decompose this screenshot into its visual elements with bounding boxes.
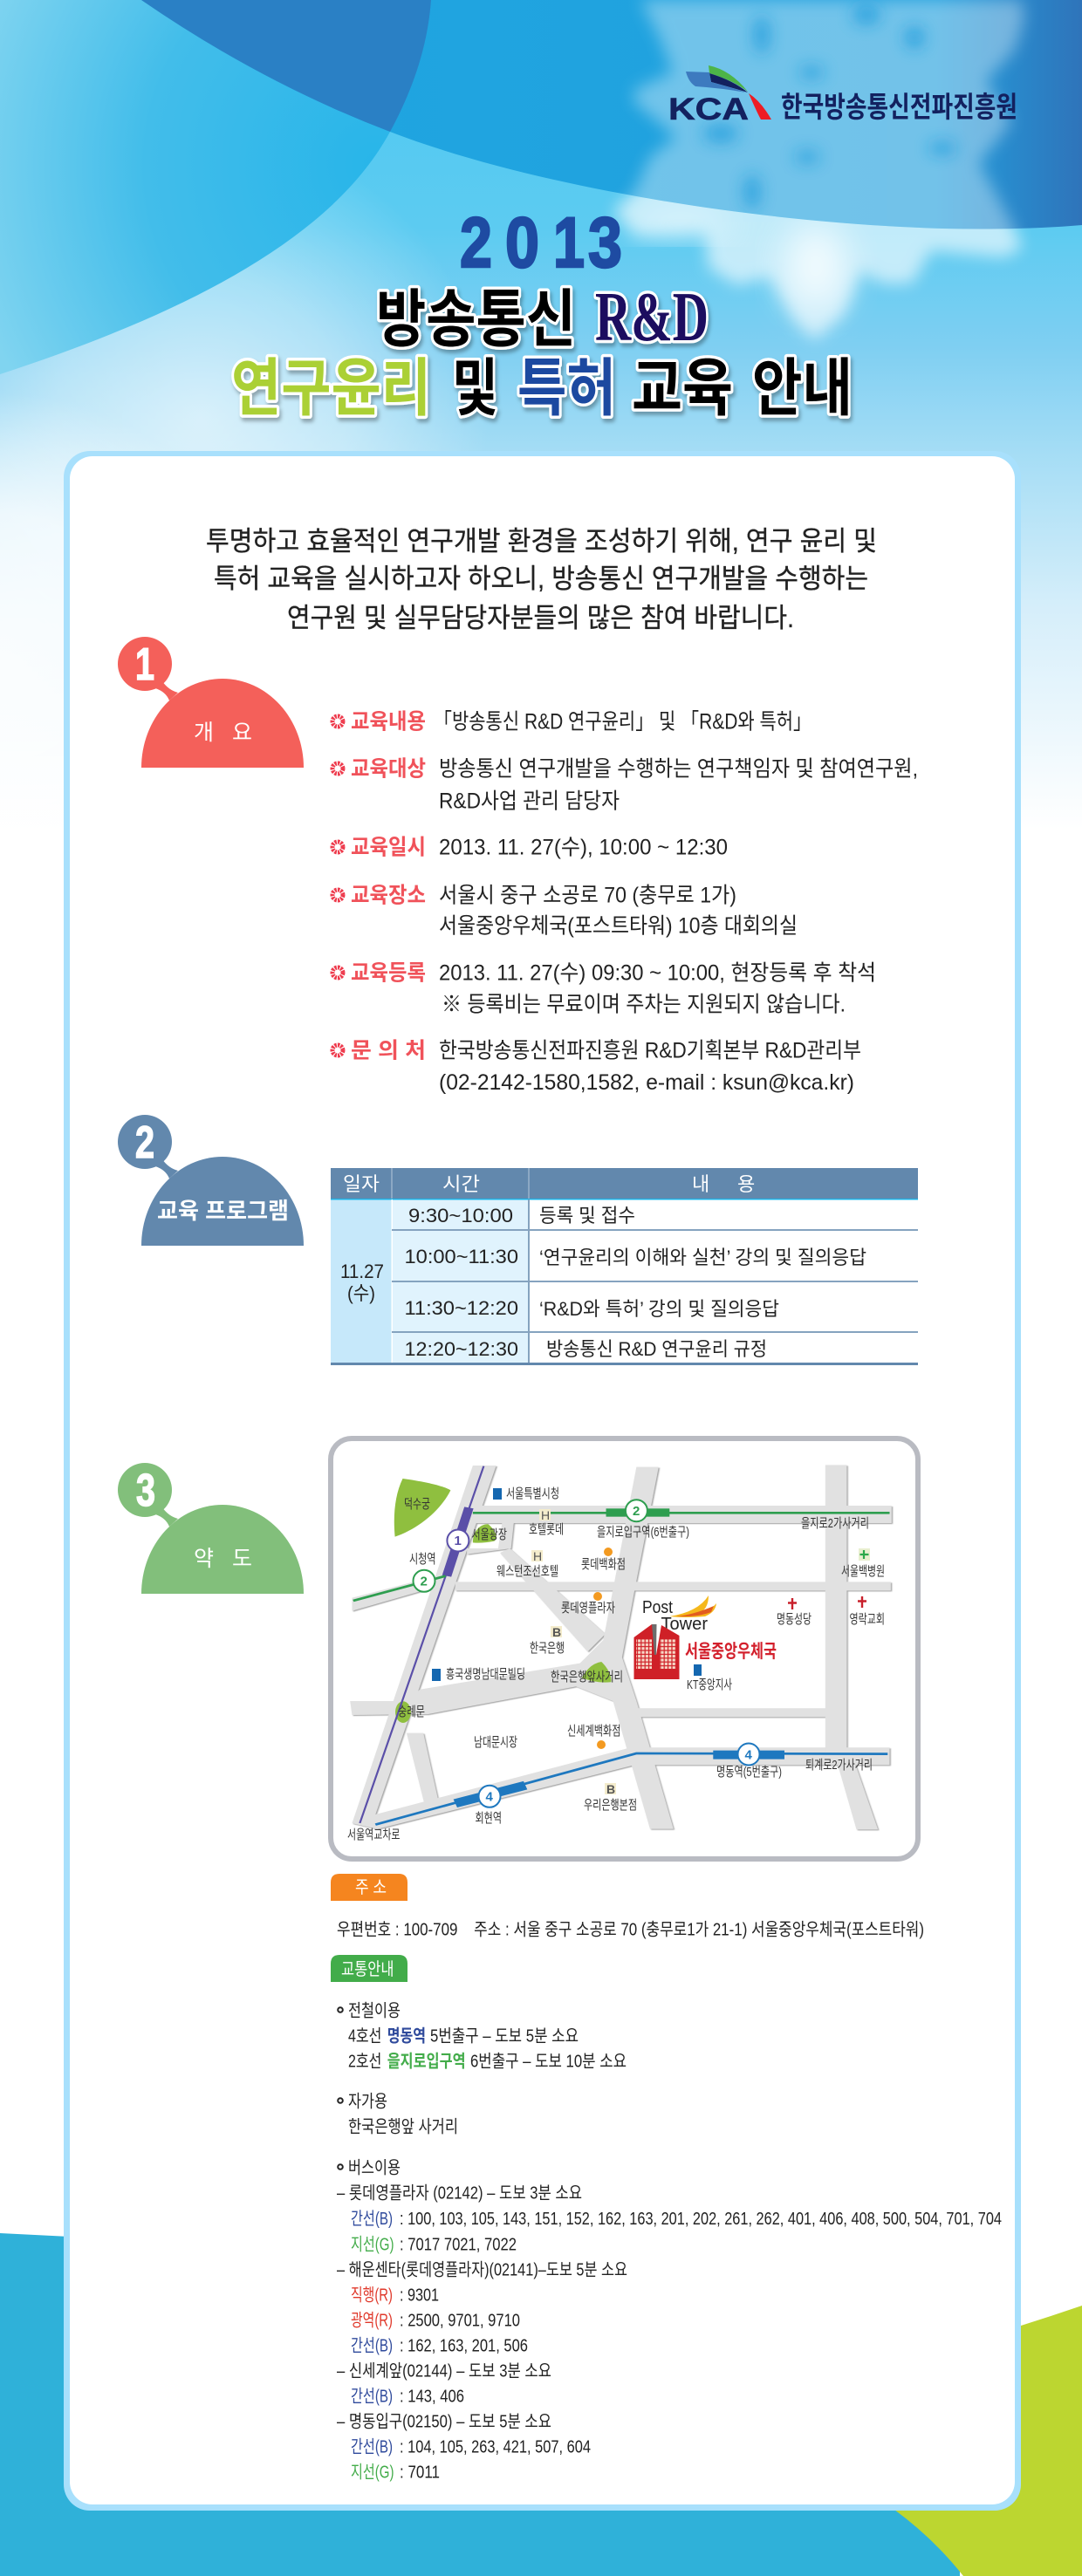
transit: bus: 간선(B) [351, 2209, 393, 2229]
badge 3: 약도 [118, 1463, 304, 1594]
logo: KCA: 한국방송통신전파진흥원 [781, 91, 1017, 123]
badge 2: 교육 프로그램 [118, 1115, 304, 1246]
transit: bus: : 9301 [400, 2286, 439, 2305]
row: registration: 9:30~10:00 [408, 1205, 513, 1227]
title: main heading [231, 279, 853, 424]
item: 교육장소: 서울중앙우체국(포스트타워) 10층 대회의실 [439, 914, 798, 939]
badge 2: 교육 프로그램: 2 [135, 1117, 154, 1168]
transit: subway: 6번출구 – 도보 10분 소요 [470, 2052, 627, 2071]
transit: bus [337, 2158, 1002, 2483]
map landmark labels: 롯데백화점 [581, 1557, 626, 1572]
station markers: 2 [633, 1504, 640, 1519]
row: regulations: 방송통신 R&D 연구윤리 규정 [546, 1338, 767, 1360]
item: 문의처: 한국방송통신전파진흥원 R&D기획본부 R&D관리부 [439, 1038, 861, 1063]
title: year: 2 [460, 203, 492, 283]
item: 교육등록: ※ 등록비는 무료이며 주차는 지원되지 않습니다. [442, 993, 846, 1017]
map landmark labels: 명동성당 [777, 1612, 812, 1627]
title: year [460, 203, 622, 283]
station markers: 1 [454, 1534, 462, 1548]
map landmark labels: 서울광장 [471, 1527, 507, 1542]
item: 교육일시: 2013. 11. 27(수), 10:00 ~ 12:30 [439, 836, 728, 860]
title: year: 0 [505, 203, 539, 283]
intro paragraph: 특허 교육을 실시하고자 하오니, 방송통신 연구개발을 수행하는 [214, 564, 868, 594]
item: 교육등록 [332, 961, 876, 1017]
item: 교육등록: 교육등록 [351, 961, 426, 986]
map landmark labels: 호텔롯데 [529, 1522, 564, 1537]
map landmark labels: 서울백병원 [841, 1564, 885, 1579]
row: ethics lecture: 10:00~11:30 [405, 1246, 518, 1268]
Post Tower logo: Post [642, 1598, 673, 1617]
row: regulations: 12:20~12:30 [405, 1338, 518, 1360]
item: 문의처: (02-2142-1580,1582, e-mail : ksun@kca.kr) [439, 1070, 854, 1095]
transit: bus: 간선(B) [351, 2437, 393, 2456]
title: main heading: 연구윤리 [231, 354, 431, 424]
tab: 주소: 주 소 [355, 1878, 387, 1897]
item: 문의처 [332, 1038, 861, 1095]
map landmark labels: 한국은행 [530, 1641, 565, 1656]
logo: KCA: KCA [668, 92, 749, 126]
intro paragraph [206, 526, 877, 633]
row: regulations [405, 1338, 767, 1360]
transit: car [338, 2092, 458, 2137]
transit: subway: 전철이용 [348, 2001, 401, 2020]
bottom shape: blue [0, 2233, 960, 2576]
map landmark labels: 한국은행앞사거리 [551, 1670, 623, 1684]
transit: bus: – 롯데영플라자 (02142) – 도보 3분 소요 [337, 2183, 582, 2204]
station markers: 2 [421, 1574, 428, 1589]
date cell: 11.27 [340, 1261, 384, 1282]
transit: subway: 명동역 [387, 2026, 426, 2046]
badge 1: 개요 [118, 637, 304, 768]
item: 교육대상: 교육대상 [351, 757, 426, 782]
transit: bus: 광역(R) [351, 2310, 393, 2331]
table header: 용 [737, 1173, 755, 1195]
item: 교육장소: 서울시 중구 소공로 70 (충무로 1가) [439, 883, 736, 907]
tab: 교통안내: 교통안내 [341, 1959, 394, 1979]
map landmark labels: 흥국생명남대문빌딩 [446, 1666, 525, 1682]
panel: main content card [64, 451, 1021, 2511]
logo: KCA [668, 65, 1017, 126]
transit: bus: – 해운센타(롯데영플라자)(02141)–도보 5분 소요 [337, 2259, 627, 2280]
map landmark labels: 회현역 [475, 1811, 502, 1826]
map pins: B [606, 1782, 615, 1796]
transit: bus: 직행(R) [351, 2286, 393, 2305]
table header: 시간 [442, 1173, 480, 1195]
title: main heading: 및 [452, 354, 498, 424]
table cell fills [331, 1168, 918, 1365]
title: main heading: 안내 [752, 354, 853, 424]
intro paragraph: 연구원 및 실무담당자분들의 많은 참여 바랍니다. [287, 603, 794, 633]
transit: car: 한국은행앞 사거리 [348, 2116, 458, 2137]
map pins: B [552, 1625, 561, 1639]
map landmark labels: KT중앙지사 [687, 1677, 732, 1692]
transit: bus: 버스이용 [348, 2158, 401, 2177]
item: 교육내용: 「방송통신 R&D 연구윤리」 및 「R&D와 특허」 [434, 710, 812, 735]
map landmark labels: 웨스턴조선호텔 [496, 1564, 558, 1579]
map landmark labels: 롯데영플라자 [561, 1601, 615, 1616]
title: main heading: 방송통신 [376, 285, 576, 355]
row: patent lecture [405, 1297, 779, 1320]
title: year: 1 [553, 203, 585, 283]
transit: subway: 을지로입구역 [387, 2052, 466, 2071]
transit: subway: 4호선 [348, 2026, 381, 2046]
map landmark labels: 을지로입구역(6번출구) [597, 1525, 689, 1540]
transit: bus: : 143, 406 [400, 2387, 464, 2406]
map frame [331, 1438, 918, 1859]
badge 2: 교육 프로그램: 교육 프로그램 [157, 1198, 289, 1224]
row: ethics lecture [405, 1246, 866, 1268]
transit: subway: 5번출구 – 도보 5분 소요 [430, 2026, 579, 2046]
bottom shape: green [829, 2306, 1082, 2576]
transit: bus: 지선(G) [351, 2235, 394, 2254]
title: main heading: R&D [595, 279, 709, 356]
item: 교육장소 [332, 883, 798, 939]
row: registration [408, 1205, 635, 1227]
table header: 일자 [343, 1173, 380, 1195]
map landmark labels: 숭례문 [398, 1705, 425, 1719]
map pins: H [533, 1549, 542, 1563]
badge 1: 개요: 1 [135, 639, 154, 690]
map landmark labels: 덕수궁 [404, 1497, 430, 1512]
item: 교육대상 [332, 757, 918, 813]
map landmark labels: 시청역 [409, 1552, 436, 1567]
building: 서울중앙우체국: 서울중앙우체국 [685, 1642, 777, 1662]
table header [343, 1173, 755, 1195]
station markers: 4 [745, 1748, 752, 1762]
transit: bus: – 신세계앞(02144) – 도보 3분 소요 [337, 2361, 551, 2381]
transit: bus: : 104, 105, 263, 421, 507, 604 [400, 2437, 591, 2456]
row: ethics lecture: ‘연구윤리의 이해와 실천’ 강의 및 질의응답 [539, 1247, 866, 1268]
item: 교육내용: 교육내용 [351, 710, 426, 735]
map landmark labels: 남대문시장 [474, 1735, 517, 1750]
map landmark labels [347, 1486, 885, 1842]
date cell: (수) [347, 1282, 375, 1304]
item: 교육내용 [332, 710, 812, 735]
building: 서울중앙우체국 [633, 1624, 777, 1679]
Post Tower logo: Tower [661, 1615, 708, 1634]
map pins: H [541, 1508, 550, 1522]
address text: 우편번호 : 100-709 주소 : 서울 중구 소공로 70 (충무로1가 21-1) 서울중앙우체국(포스트타워) [337, 1919, 924, 1940]
badge 3: 약도: 도 [232, 1547, 252, 1571]
snowflake decoration [613, 0, 1024, 340]
transit: bus: 지선(G) [351, 2462, 394, 2483]
badge 3: 약도: 약 [194, 1547, 214, 1571]
transit: subway: 2호선 [348, 2052, 381, 2071]
transit: bus: : 7011 [400, 2463, 440, 2483]
transit: bus: : 7017 7021, 7022 [400, 2235, 517, 2254]
item: 교육등록: 2013. 11. 27(수) 09:30 ~ 10:00, 현장등록 후 착석 [439, 961, 876, 986]
item: 교육일시: 교육일시 [351, 836, 426, 860]
station markers [414, 1500, 759, 1807]
transit: bus: 간선(B) [351, 2387, 393, 2406]
Post Tower logo [642, 1595, 716, 1634]
title: main heading: 특허 [517, 354, 616, 424]
map roads and lines [350, 1465, 892, 1829]
row: patent lecture: 11:30~12:20 [405, 1297, 518, 1319]
row: patent lecture: ‘R&D와 특허’ 강의 및 질의응답 [539, 1298, 779, 1320]
transit: car: 자가용 [348, 2092, 387, 2111]
transit: bus: 간선(B) [351, 2336, 393, 2355]
item: 교육대상: R&D사업 관리 담당자 [439, 789, 620, 813]
row: registration: 등록 및 접수 [539, 1205, 635, 1227]
date cell [340, 1261, 384, 1304]
title: main heading: 교육 [632, 354, 733, 424]
map [331, 1438, 918, 1859]
map landmark labels: 우리은행본점 [584, 1798, 637, 1813]
transit: bus: – 명동입구(02150) – 도보 5분 소요 [337, 2411, 551, 2432]
map landmark labels: 퇴계로2가사거리 [805, 1758, 873, 1773]
item: 교육대상: 방송통신 연구개발을 수행하는 연구책임자 및 참여연구원, [439, 757, 918, 782]
station markers: 4 [485, 1790, 494, 1804]
transit: bus: : 162, 163, 201, 506 [400, 2336, 528, 2355]
item: 문의처: 문 의 처 [351, 1038, 426, 1063]
map landmark labels: 신세계백화점 [567, 1724, 621, 1739]
tab: 주소 [331, 1874, 407, 1901]
overview list [332, 710, 918, 1095]
badge 3: 약도: 3 [136, 1466, 155, 1516]
transit: bus: : 2500, 9701, 9710 [400, 2312, 520, 2331]
map landmark labels: 을지로2가사거리 [801, 1516, 869, 1531]
tab: 교통안내 [331, 1955, 407, 1982]
title: year: 3 [588, 203, 622, 283]
map landmark labels: 서울역교차로 [347, 1828, 401, 1842]
map landmark labels: 영락교회 [850, 1612, 885, 1627]
table header: 내 [692, 1173, 709, 1195]
transit: subway [338, 2001, 627, 2071]
map landmark labels: 명동역(5번출구) [716, 1765, 782, 1780]
item: 교육장소: 교육장소 [351, 883, 426, 907]
map pins [432, 1488, 870, 1796]
badge 1: 개요: 요 [232, 721, 252, 745]
map landmark labels: 서울특별시청 [506, 1486, 559, 1501]
badge 1: 개요: 개 [194, 721, 214, 745]
schedule table [331, 1168, 918, 1365]
intro paragraph: 투명하고 효율적인 연구개발 환경을 조성하기 위해, 연구 윤리 및 [206, 526, 877, 557]
